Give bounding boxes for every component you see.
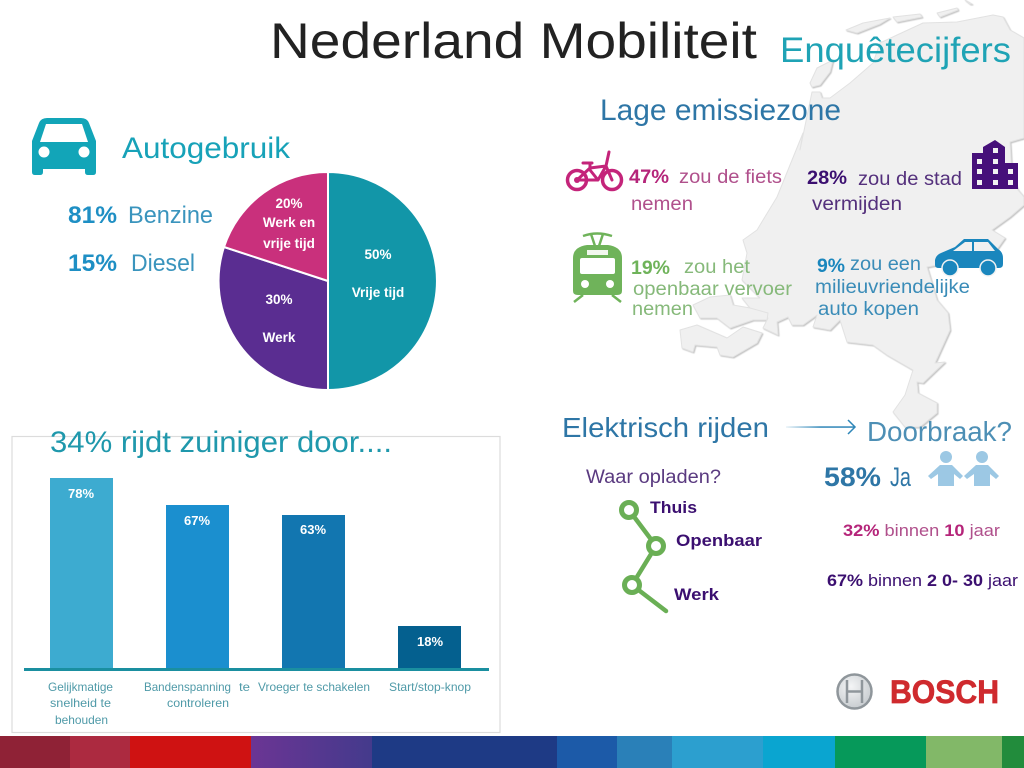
heading: 34% rijdt zuiniger: 34% rijdt zuiniger door.... — [50, 426, 392, 459]
stat: 9% milieuvriendelijke auto: auto kopen — [818, 299, 919, 320]
stat: 19% openbaar vervoer: 19% — [631, 258, 670, 279]
bar labels: Start/stop-knop — [389, 680, 471, 694]
bar labels: Gelijkmatige — [48, 680, 113, 694]
bar: 67% — [166, 505, 229, 669]
pie chart: 20% — [275, 196, 303, 211]
stat: 47% fiets: 47% — [629, 167, 669, 188]
bar labels: behouden — [55, 713, 108, 727]
diagram: charging locations: Werk — [674, 586, 720, 604]
logo: Bosch: BOSCH — [890, 674, 999, 710]
stat: 9% milieuvriendelijke auto — [815, 254, 970, 320]
stat: benzine: 81% — [68, 202, 117, 229]
stat: 9% milieuvriendelijke auto: milieuvriendelijke — [815, 277, 970, 298]
icon: city building — [972, 140, 1018, 189]
icon: car front — [32, 118, 96, 175]
heading: Doorbraak?: Doorbraak? — [867, 416, 1012, 447]
stat: 47% fiets — [629, 167, 782, 215]
icon: bicycle — [568, 152, 622, 190]
diagram: charging locations — [622, 499, 763, 611]
stat: diesel: Diesel — [131, 250, 195, 277]
stat: 28% stad: vermijden — [812, 194, 902, 215]
icon: train — [573, 234, 622, 302]
stat: 28% stad — [807, 168, 962, 215]
pie chart: Werk en — [263, 215, 315, 230]
panel: Elektrisch rijden — [562, 412, 1018, 611]
pie chart: 30% — [265, 292, 293, 307]
colour strip — [0, 736, 1024, 768]
heading: Lage emissiezone: Lage emissiezone — [600, 94, 841, 127]
stat: 9% milieuvriendelijke auto: 9% — [817, 256, 845, 277]
bar labels: Bandenspanning — [144, 680, 231, 694]
pie chart: Werk — [263, 330, 296, 345]
stat: 58% Ja — [824, 462, 912, 492]
panel: Autogebruik — [32, 118, 437, 390]
stat: diesel — [68, 250, 195, 277]
stat: 58% Ja: Ja — [890, 462, 912, 492]
stat: benzine: Benzine — [128, 202, 213, 229]
logo: Bosch — [838, 674, 999, 710]
stat: 9% milieuvriendelijke auto: zou een — [850, 254, 921, 275]
stat: 19% openbaar vervoer: openbaar vervoer — [633, 279, 793, 300]
text: Waar opladen?: Waar opladen? — [586, 467, 721, 488]
bar: 78%: 78% — [68, 486, 94, 501]
bar: 63%: 63% — [300, 522, 326, 537]
pie chart: 50% — [364, 247, 392, 262]
stat: 28% stad: zou de stad — [858, 169, 962, 190]
bar: 67%: 67% — [184, 513, 210, 528]
icon: two people — [928, 451, 999, 486]
stat: diesel: 15% — [68, 250, 117, 277]
stat: 58% Ja: 58% — [824, 462, 881, 492]
bar: 18%: 18% — [417, 634, 443, 649]
stat: 19% openbaar vervoer — [631, 257, 793, 320]
stat: 19% openbaar vervoer: nemen — [632, 299, 693, 320]
bar: 78% — [50, 478, 113, 669]
bar: 63% — [282, 515, 345, 669]
stat: 32% binnen 10 jaar: 32% binnen 10 jaar — [843, 521, 1000, 540]
diagram: charging locations: Openbaar — [676, 532, 763, 550]
bar labels: controleren — [167, 696, 229, 710]
heading: Enquêtecijfers: Enquêtecijfers — [780, 31, 1011, 70]
stat: 19% openbaar vervoer: zou het — [684, 257, 751, 278]
heading: Autogebruik: Autogebruik — [122, 132, 291, 165]
bar: 18% — [398, 626, 461, 669]
pie chart: vrije tijd — [263, 236, 315, 251]
stat: 28% stad: 28% — [807, 168, 847, 189]
arrow — [786, 420, 855, 434]
diagram: charging locations: Thuis — [650, 499, 697, 517]
map of the Netherlands — [680, 0, 1024, 427]
stat: benzine — [68, 202, 213, 229]
bar labels: te — [239, 680, 250, 694]
stat: 47% fiets: zou de fiets — [679, 167, 782, 188]
pie chart: Vrije tijd — [352, 285, 404, 300]
panel: bar chart — [12, 426, 500, 732]
title: Nederland Mobiliteit — [270, 13, 757, 69]
bar labels — [48, 680, 471, 727]
stat: 47% fiets: nemen — [631, 194, 693, 215]
panel: Lage emissiezone — [568, 94, 1018, 320]
bar labels: Vroeger te schakelen — [258, 680, 370, 694]
pie chart — [219, 172, 437, 390]
stat: 67% binnen 20-30 jaar: 67% binnen 2 0- 30 jaar — [827, 571, 1018, 590]
bar labels: snelheid te — [50, 696, 111, 710]
icon: car side — [935, 239, 1003, 276]
heading: Elektrisch rijden: Elektrisch rijden — [562, 412, 769, 443]
